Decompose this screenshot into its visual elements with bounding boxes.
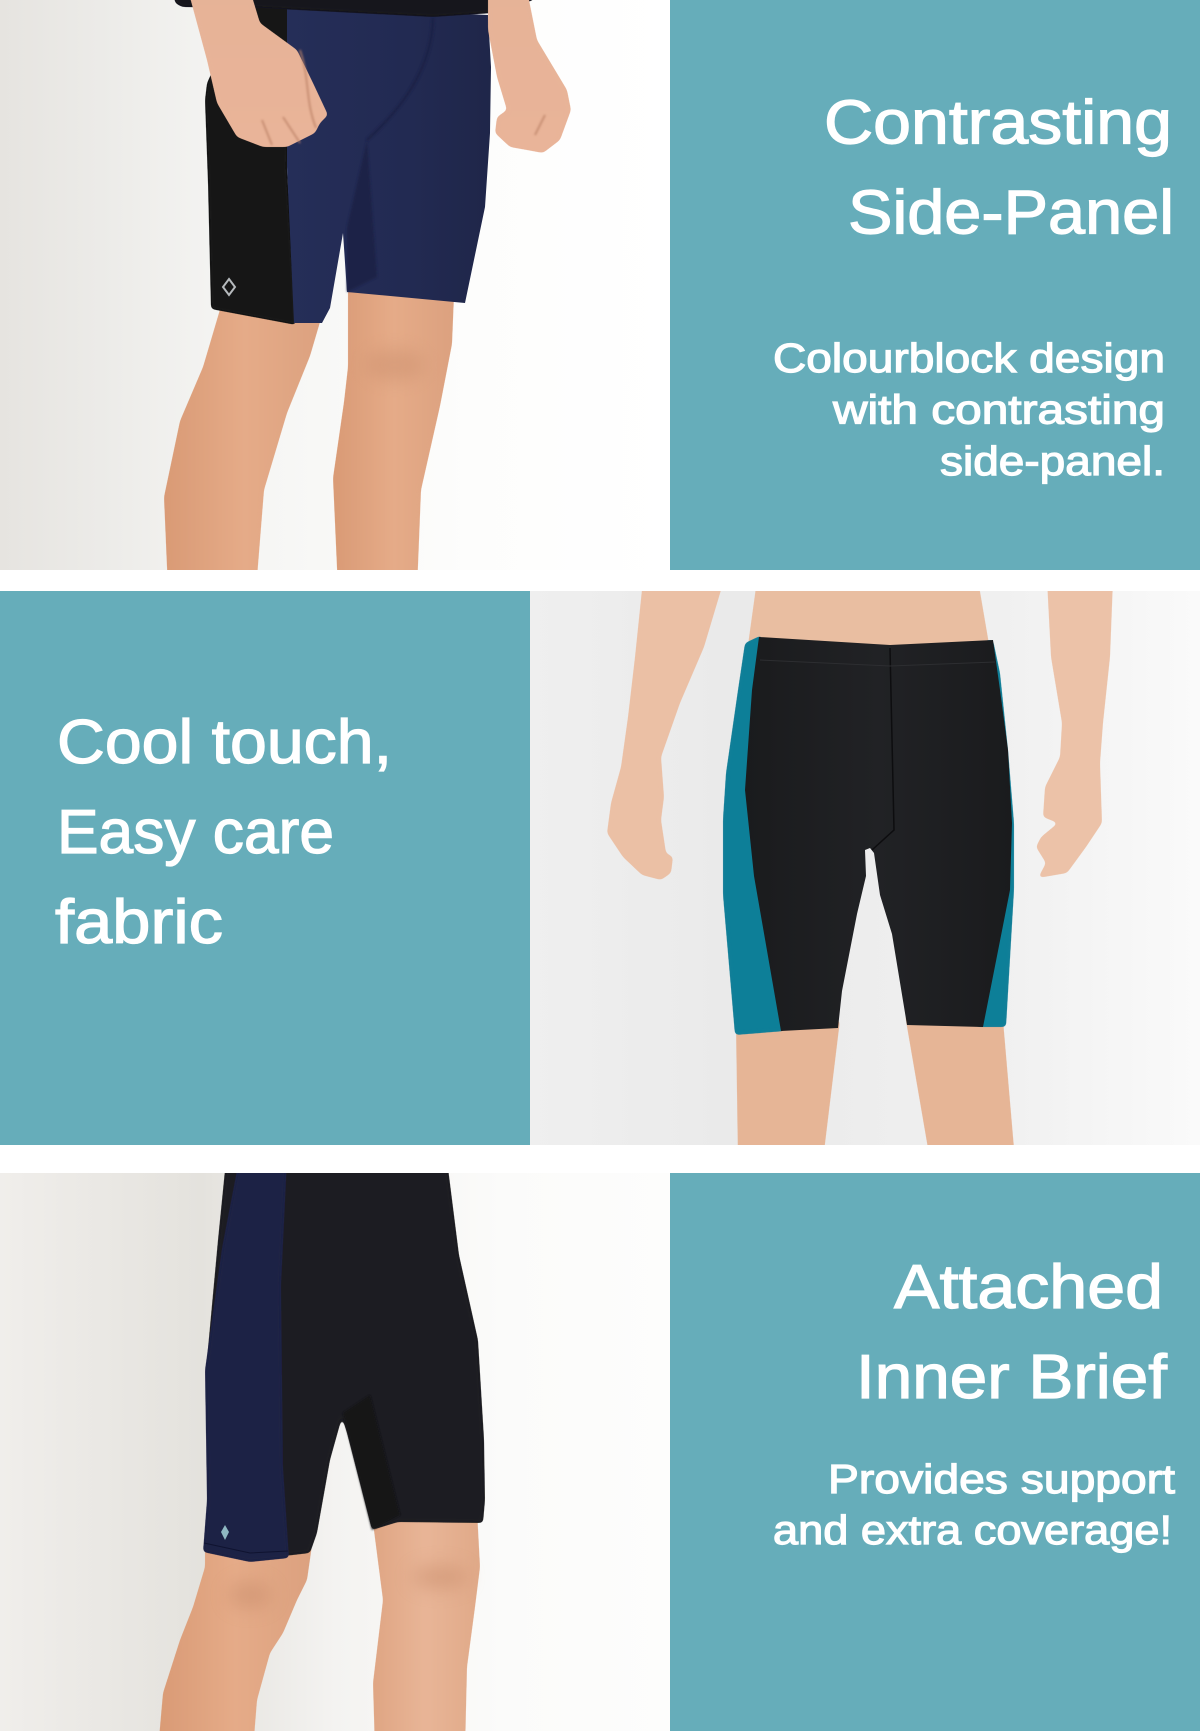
teal panel <box>670 1173 1200 1731</box>
photo: side view of black shorts with navy panel <box>0 1173 486 1731</box>
left hand <box>188 0 328 147</box>
heading: fabric <box>55 888 223 957</box>
description: with contrasting <box>832 386 1165 432</box>
description: Colourblock design <box>773 335 1165 381</box>
knee shading <box>228 1565 468 1609</box>
shirt <box>173 0 535 17</box>
description <box>773 335 1165 484</box>
description <box>773 1456 1176 1553</box>
waistband stitch <box>760 660 995 666</box>
heading <box>824 88 1174 248</box>
finger lines <box>262 50 545 145</box>
section: cool touch fabric <box>0 580 1200 1160</box>
logo <box>221 1525 229 1540</box>
photo: front view of navy shorts <box>0 0 571 570</box>
black side panel <box>205 0 296 325</box>
centre seam <box>872 648 894 850</box>
heading: Inner Brief <box>856 1343 1168 1412</box>
right leg <box>372 1510 480 1733</box>
heading <box>55 708 392 957</box>
heading: Side-Panel <box>848 178 1174 248</box>
description: Provides support <box>828 1456 1176 1502</box>
black shorts <box>206 1160 485 1560</box>
navy panel <box>287 5 491 323</box>
left teal panel <box>723 635 785 1035</box>
back leg shadow <box>343 1395 400 1530</box>
description: side-panel. <box>940 438 1165 484</box>
description: and extra coverage! <box>773 1507 1172 1553</box>
black shorts <box>745 637 1012 1031</box>
heading: Contrasting <box>824 88 1172 158</box>
section: contrasting side-panel <box>0 0 1200 590</box>
crease <box>367 18 433 140</box>
knee shading <box>376 352 416 378</box>
right leg <box>906 1018 1014 1145</box>
left leg <box>164 310 320 570</box>
left leg <box>158 1545 312 1733</box>
right arm <box>1036 580 1113 878</box>
left arm <box>607 580 724 880</box>
logo <box>223 279 235 295</box>
heading: Cool touch, <box>57 708 392 777</box>
right leg <box>333 285 454 590</box>
teal panel <box>670 0 1200 570</box>
heading <box>856 1253 1168 1412</box>
heading: Easy care <box>57 798 334 867</box>
photo: back view of black shorts with teal panels <box>530 591 1138 1145</box>
right hand <box>488 0 571 153</box>
teal panel <box>0 591 530 1145</box>
inner leg shadow <box>347 140 377 292</box>
right teal panel <box>975 640 1014 1027</box>
hem stitch <box>204 1543 288 1553</box>
heading: Attached <box>894 1253 1163 1322</box>
left leg <box>736 1021 840 1145</box>
navy panel <box>203 1160 289 1562</box>
torso <box>748 591 988 645</box>
section: attached inner brief <box>0 1160 1200 1733</box>
